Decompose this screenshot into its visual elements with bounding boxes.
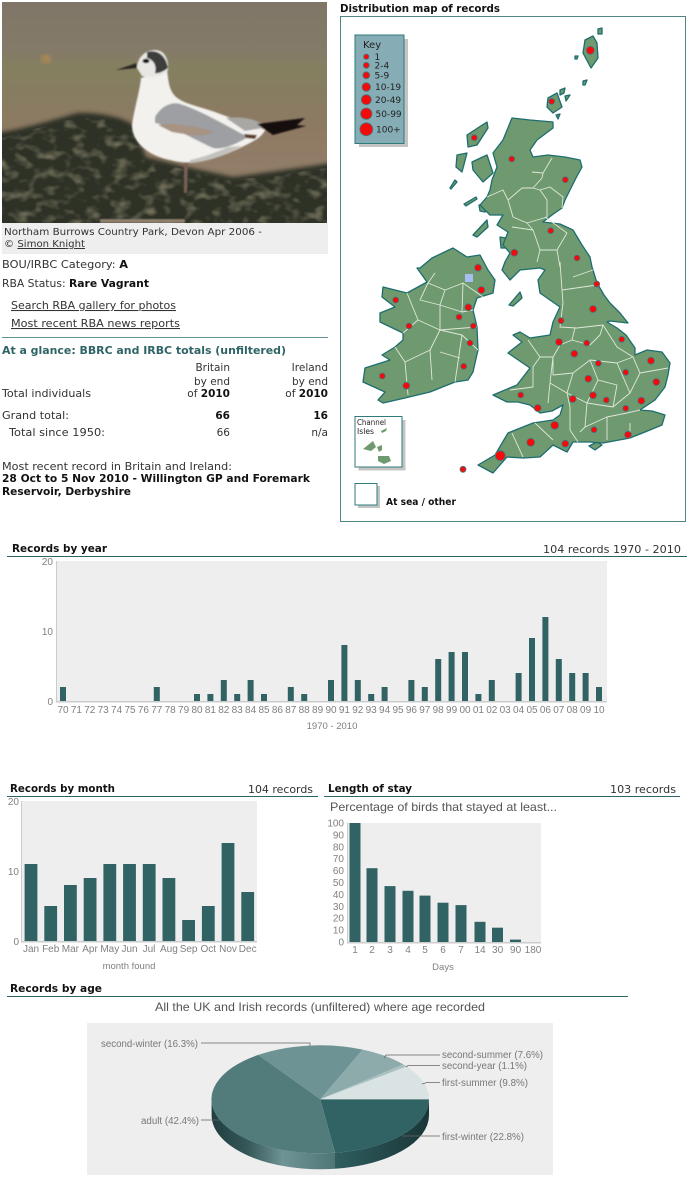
- heading: distribution map: Distribution map of records: [340, 3, 500, 15]
- bar chart: records by year: 89: [312, 705, 324, 716]
- heading: records by year: Records by year: [12, 543, 108, 555]
- map: county boundaries: [395, 158, 668, 457]
- bar chart: records by year: 70: [57, 705, 69, 716]
- bar chart: records by year: 85: [258, 705, 270, 716]
- bar chart: length of stay: 2: [369, 945, 375, 956]
- bar chart: length of stay: 80: [333, 842, 344, 853]
- bar chart: records by month: Sep: [180, 944, 198, 955]
- bar chart: length of stay: 14: [474, 945, 486, 956]
- heading: length of stay: [324, 783, 680, 797]
- category and status: RBA Status: Rare Vagrant: [2, 278, 149, 290]
- photo caption: © Simon Knight: [4, 239, 85, 250]
- bar chart: records by year: 79: [178, 705, 190, 716]
- bar chart: records by year: 93: [366, 705, 377, 716]
- bar chart: length of stay: 70: [333, 854, 344, 865]
- bar chart: length of stay: 10: [333, 926, 344, 937]
- bar chart: records by month: Mar: [62, 944, 80, 955]
- panel: at a glance totals: of 2010: [285, 388, 328, 400]
- bar chart: records by year: 92: [352, 705, 364, 716]
- bar chart: records by year: 84: [245, 705, 257, 716]
- bar chart: length of stay: 1: [352, 945, 358, 956]
- bar chart: records by year: 78: [165, 705, 176, 716]
- bar chart: records by year: 94: [379, 705, 391, 716]
- bar chart: records by year: 76: [138, 705, 149, 716]
- bar chart: length of stay: 30: [333, 902, 344, 913]
- bar chart: length of stay: 40: [333, 890, 344, 901]
- bar chart: records by year: 01: [473, 705, 484, 716]
- most recent record: 28 Oct to 5 Nov 2010 - Willington GP and Foremark: [2, 473, 311, 485]
- map key: 1: [374, 53, 380, 63]
- bar chart: records by month: Jul: [143, 944, 155, 955]
- bar chart: records by year: 91: [339, 705, 350, 716]
- panel: at a glance totals: Grand total:: [2, 410, 69, 422]
- panel: at a glance totals: 16: [313, 410, 328, 422]
- bar chart: records by month: 20: [8, 797, 19, 808]
- panel: at a glance totals: [1, 337, 328, 439]
- bar chart: length of stay: 60: [333, 866, 344, 877]
- at sea / other box: [355, 484, 456, 508]
- bar chart: records by year: 99: [446, 705, 458, 716]
- category and status: [2, 259, 149, 290]
- heading: records by month: [7, 783, 318, 797]
- bar chart: records by year: 04: [513, 705, 525, 716]
- photo caption: [2, 223, 328, 254]
- inset: Channel Isles: Isles: [357, 427, 374, 436]
- panel: at a glance totals: of 2010: [187, 388, 230, 400]
- bar chart: records by year: 80: [191, 705, 203, 716]
- panel: age pie chart: [87, 1023, 553, 1175]
- bar chart: records by month: Jan: [23, 944, 39, 955]
- bar chart: records by month: Oct: [201, 944, 216, 955]
- photo: gull standing on seaweed: [0, 2, 332, 230]
- bar chart: records by year: 96: [406, 705, 417, 716]
- bar chart: length of stay: 180: [525, 945, 542, 956]
- bar chart: records by year: 71: [71, 705, 82, 716]
- bar chart: records by year: 73: [98, 705, 109, 716]
- panel: at a glance totals: n/a: [311, 427, 328, 439]
- links: Search RBA gallery for photos: [11, 300, 176, 312]
- heading: records by year: [7, 543, 687, 557]
- pie: slice labels: first-summer (9.8%): [442, 1078, 528, 1089]
- map key: 20-49: [375, 96, 401, 106]
- map: Shetland, Orkney and Scottish islands: [450, 28, 602, 450]
- bar chart: records by month: 10: [8, 867, 19, 878]
- map: record dots: [379, 46, 660, 472]
- bar chart: length of stay: 7: [458, 945, 464, 956]
- bar chart: records by year: 77: [151, 705, 163, 716]
- bar chart: records by year: 83: [232, 705, 243, 716]
- map key: [355, 35, 408, 147]
- pie: slices: [211, 1045, 429, 1153]
- links: Most recent RBA news reports: [11, 318, 180, 330]
- bar chart: records by year: 02: [486, 705, 498, 716]
- bar chart: length of stay: 90: [333, 830, 344, 841]
- bar chart: length of stay: 6: [440, 945, 446, 956]
- map: Great Britain: [478, 118, 670, 473]
- bar chart: length of stay: 90: [510, 945, 522, 956]
- map key: Key: [363, 40, 381, 51]
- bar chart: records by year: 88: [299, 705, 310, 716]
- category and status: BOU/IRBC Category: A: [2, 259, 129, 271]
- pie: slice labels: second-summer (7.6%): [442, 1050, 543, 1061]
- bar chart: length of stay: 4: [405, 945, 411, 956]
- bar chart: records by year: 07: [553, 705, 565, 716]
- bar chart: length of stay: 0: [338, 938, 344, 948]
- heading: records by age: Records by age: [10, 983, 102, 995]
- panel: distribution map: [340, 16, 686, 522]
- panel: at a glance totals: 66: [217, 427, 230, 439]
- bar chart: records by month: [8, 797, 257, 972]
- at sea / other box: At sea / other: [386, 497, 456, 508]
- bar chart: records by year: 82: [218, 705, 230, 716]
- bar chart: records by year: 95: [392, 705, 404, 716]
- map: Ireland: [363, 248, 495, 403]
- bar chart: records by year: 81: [205, 705, 216, 716]
- inset: Channel Isles: [355, 416, 406, 470]
- bar chart: records by month: Aug: [160, 944, 178, 955]
- pie: slice labels: adult (42.4%): [141, 1116, 199, 1127]
- pie: side wall: [212, 1099, 429, 1169]
- bar chart: records by year: 98: [433, 705, 444, 716]
- links: [11, 300, 180, 330]
- bar chart: records by year: 03: [500, 705, 511, 716]
- inset: Channel Isles: Channel: [357, 418, 386, 427]
- bar chart: records by year: 1970 - 2010: [307, 721, 357, 732]
- bar chart: records by year: 10: [42, 627, 53, 638]
- bar chart: length of stay: 3: [387, 945, 393, 956]
- most recent record: Reservoir, Derbyshire: [2, 486, 131, 498]
- chart subtitle: length of stay: Percentage of birds that stayed at least...: [330, 800, 557, 814]
- pie: leader lines: [201, 1043, 440, 1136]
- map key: 100+: [376, 126, 401, 136]
- bar chart: records by month: 0: [13, 937, 19, 948]
- pie: slice labels: first-winter (22.8%): [442, 1132, 524, 1143]
- bar chart: records by month: Dec: [239, 944, 257, 955]
- heading: length of stay: Length of stay: [328, 783, 412, 795]
- bar chart: records by year: 90: [325, 705, 337, 716]
- pie: slice labels: second-year (1.1%): [442, 1061, 527, 1072]
- heading: length of stay: 103 records: [610, 784, 676, 796]
- bar chart: length of stay: 30: [492, 945, 504, 956]
- bar chart: records by year: 05: [526, 705, 538, 716]
- bar chart: records by year: 09: [580, 705, 592, 716]
- map key: 50-99: [376, 110, 402, 120]
- map: Lough Neagh: [465, 274, 473, 282]
- pie: slice labels: second-winter (16.3%): [101, 1039, 198, 1050]
- panel: at a glance totals: by end: [194, 376, 230, 388]
- bar chart: length of stay: 100: [327, 818, 344, 830]
- bar chart: records by year: 75: [124, 705, 136, 716]
- bar chart: records by year: 00: [459, 705, 471, 716]
- panel: at a glance totals: by end: [292, 376, 328, 388]
- bar chart: records by year: [42, 557, 607, 732]
- most recent record: [2, 461, 311, 498]
- bar chart: records by year: 06: [540, 705, 551, 716]
- photo caption: Northam Burrows Country Park, Devon Apr 2006 -: [4, 227, 262, 238]
- map key: 2-4: [374, 62, 389, 72]
- heading: records by year: 104 records 1970 - 2010: [543, 544, 681, 556]
- heading: records by month: 104 records: [248, 784, 313, 796]
- bar chart: length of stay: 50: [333, 878, 344, 889]
- panel: at a glance totals: Ireland: [292, 362, 328, 374]
- bar chart: records by month: Jun: [121, 944, 138, 955]
- bar chart: records by month: May: [100, 944, 119, 955]
- panel: at a glance totals: Total individuals: [1, 388, 91, 400]
- bar chart: length of stay: [327, 818, 542, 973]
- bar chart: records by year: 72: [84, 705, 96, 716]
- bar chart: records by year: 20: [42, 557, 53, 568]
- bar chart: records by year: 0: [47, 697, 53, 708]
- map key: 10-19: [375, 83, 401, 93]
- bar chart: records by month: month found: [103, 961, 155, 972]
- bar chart: records by month: Feb: [42, 944, 60, 955]
- bar chart: records by year: 74: [111, 705, 123, 716]
- chart title: records by age: All the UK and Irish records (unfiltered) where age recorded: [155, 1000, 485, 1014]
- bar chart: records by year: 08: [567, 705, 578, 716]
- map key: 5-9: [374, 72, 389, 82]
- most recent record: Most recent record in Britain and Ireland:: [2, 461, 232, 473]
- bar chart: records by year: 86: [272, 705, 283, 716]
- panel: at a glance totals: Britain: [195, 362, 230, 374]
- bar chart: length of stay: 5: [422, 945, 428, 956]
- bar chart: records by month: Apr: [82, 944, 98, 955]
- pie: slice labels: [101, 1039, 543, 1143]
- bar chart: records by year: 10: [593, 705, 605, 716]
- panel: at a glance totals: 66: [215, 410, 230, 422]
- bar chart: records by year: 97: [419, 705, 431, 716]
- bar chart: records by month: Nov: [219, 944, 237, 955]
- bar chart: length of stay: 20: [333, 914, 344, 925]
- heading: records by month: Records by month: [10, 783, 115, 795]
- panel: at a glance totals: At a glance: BBRC and IRBC totals (unfiltered): [2, 345, 286, 357]
- bar chart: length of stay: Days: [432, 962, 454, 973]
- panel: at a glance totals: Total since 1950:: [8, 427, 105, 439]
- bar chart: records by year: 87: [285, 705, 297, 716]
